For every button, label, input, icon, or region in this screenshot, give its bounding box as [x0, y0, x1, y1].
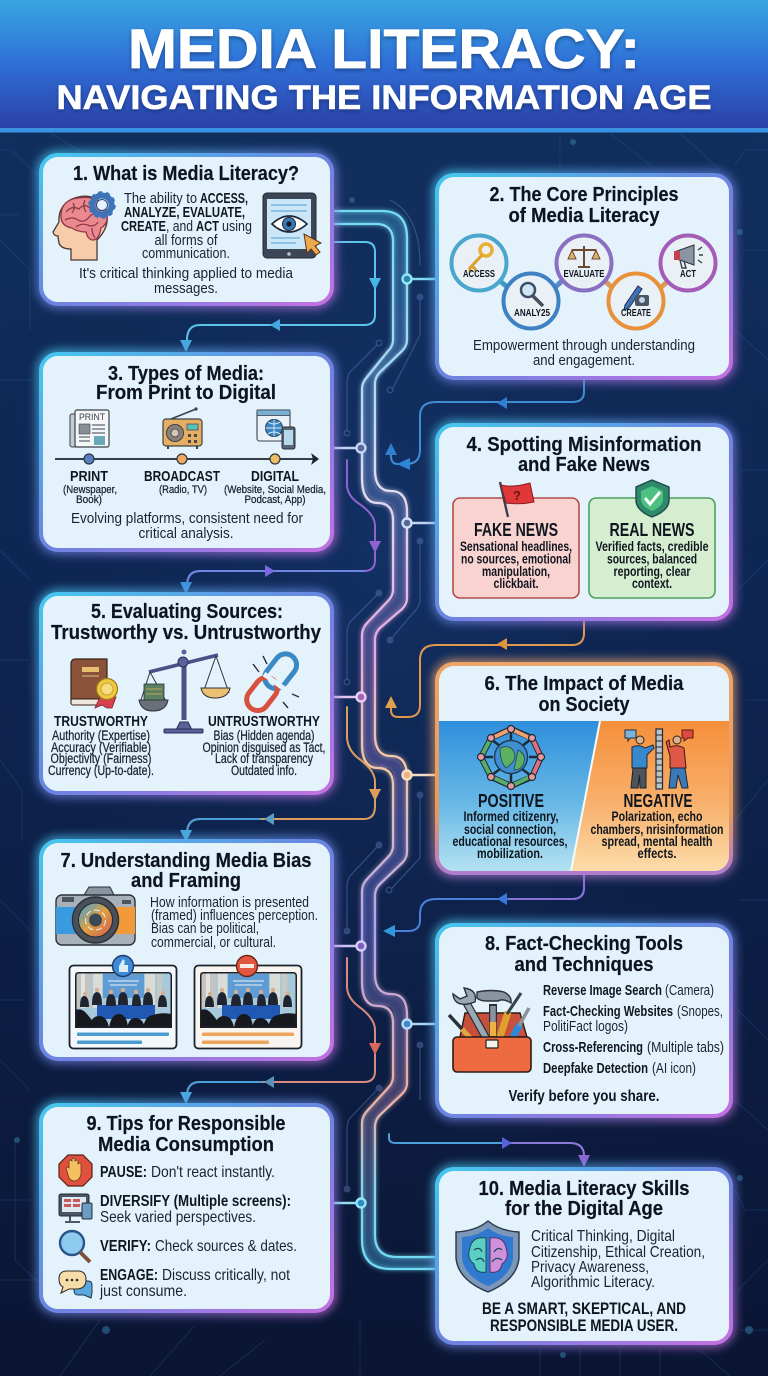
text: framing description: [150, 894, 318, 951]
tip: verify: VERIFY:: [100, 1238, 151, 1255]
labels: media types: (Newspaper,: [63, 484, 117, 496]
heading: for the Digital Age: [505, 1198, 663, 1220]
column: positive: educational resources,: [452, 834, 568, 849]
list: fact-checking methods: PolitiFact logos): [543, 1018, 628, 1035]
text: skills list: [531, 1228, 705, 1291]
column: negative: effects.: [638, 846, 676, 861]
tip: diversify: [59, 1193, 291, 1226]
title: MEDIA LITERACY:: [128, 19, 640, 82]
card: real news: sources, balanced: [607, 552, 697, 566]
column: untrustworthy: Opinion disguised as Tact,: [202, 740, 326, 755]
heading: 6. The Impact of Media: [484, 673, 684, 695]
heading: and Fake News: [518, 454, 650, 476]
timeline chart: [55, 453, 319, 465]
panel: 1 what is media literacy: [41, 155, 332, 304]
tip: pause: Don't react instantly.: [151, 1164, 275, 1181]
column: positive: POSITIVE: [478, 791, 544, 811]
principle: act: ACT: [680, 268, 696, 280]
text: definition: ACCESS,: [200, 190, 248, 207]
arrow: panel 3 to panel 5: [180, 460, 381, 594]
column: positive: Informed citizenry,: [464, 809, 558, 824]
principle: evaluate: [556, 236, 612, 290]
principle: act: [660, 236, 716, 290]
panel: 10 digital age skills: [437, 1169, 731, 1343]
card: real news: [589, 480, 715, 598]
tip: diversify: Seek varied perspectives.: [100, 1209, 256, 1226]
heading: 10. Media Literacy Skills: [478, 1178, 690, 1200]
labels: media types: (Website, Social Media,: [224, 484, 326, 496]
heading: [485, 933, 683, 976]
column: trustworthy: [48, 713, 154, 778]
principle: analyze: [504, 274, 558, 328]
heading: of Media Literacy: [508, 205, 660, 227]
heading: 4. Spotting Misinformation: [466, 434, 702, 456]
column: untrustworthy: [202, 713, 326, 778]
list: fact-checking methods: Reverse Image Search: [543, 982, 662, 999]
heading: Media Consumption: [98, 1134, 274, 1156]
text: definition: all forms of: [154, 232, 218, 249]
panel: 5 evaluating sources: [41, 594, 332, 793]
heading: [51, 601, 322, 644]
heading: Trustworthy vs. Untrustworthy: [51, 622, 322, 644]
column: trustworthy: Currency (Up-to-date).: [48, 763, 154, 778]
labels: media types: BROADCAST: [144, 468, 220, 485]
text: definition: , and: [166, 218, 193, 235]
text: definition: messages.: [154, 280, 218, 297]
text: definition: communication.: [142, 245, 230, 262]
tip: verify: Check sources & dates.: [155, 1238, 297, 1255]
faint traces: [344, 200, 423, 1192]
principle: access: [452, 236, 506, 290]
text: definition: using: [222, 218, 252, 235]
icon: green shield: [636, 480, 669, 517]
labels: media types: PRINT: [70, 468, 108, 485]
arrow: panel 1 to panel 3: [180, 242, 381, 352]
heading: [96, 363, 276, 404]
text: definition: ANALYZE, EVALUATE,: [124, 204, 245, 221]
card: real news: Verified facts, credible: [596, 539, 709, 554]
heading: From Print to Digital: [96, 382, 276, 404]
labels: media types: [63, 468, 326, 506]
panel: 6 impact of media: [437, 664, 731, 873]
principle: access: ACCESS: [463, 268, 495, 280]
panel: 2 core principles: [437, 175, 731, 378]
heading: [60, 850, 312, 892]
column: trustworthy: Objectivity (Fairness): [50, 751, 152, 766]
heading: and Framing: [131, 870, 241, 892]
title: NAVIGATING THE INFORMATION AGE: [56, 79, 712, 117]
text: types summary: critical analysis.: [138, 525, 234, 542]
column: negative: NEGATIVE: [624, 791, 692, 811]
panel: 8 fact-checking tools: [437, 925, 731, 1116]
tip: engage: ENGAGE:: [100, 1267, 158, 1284]
text: types summary: Evolving platforms, consistent need for: [71, 510, 303, 527]
list: fact-checking methods: Deepfake Detection: [543, 1060, 648, 1077]
column: positive: [452, 791, 568, 861]
text: principle summary: Empowerment through understanding: [473, 337, 695, 354]
labels: media types: Podcast, App): [244, 494, 306, 506]
text: closing call to action: RESPONSIBLE MEDIA USER.: [490, 1316, 678, 1335]
text: definition: ACT: [196, 218, 219, 235]
text: framing description: Bias can be political,: [151, 920, 259, 937]
icon: radio: [163, 407, 202, 449]
column: trustworthy: Authority (Expertise): [52, 728, 150, 743]
arrow: panel 4 to panel 6: [385, 619, 584, 717]
heading: [86, 1113, 286, 1156]
card: real news: reporting, clear: [614, 564, 691, 579]
principle chain links: [500, 281, 668, 291]
labels: media types: Book): [76, 494, 102, 506]
card: fake news: FAKE NEWS: [474, 520, 558, 540]
tip: engage: Discuss critically, not: [162, 1267, 290, 1284]
list: fact-checking methods: (AI icon): [652, 1060, 696, 1077]
labels: media types: (Radio, TV): [159, 484, 207, 496]
text: framing description: (framed) influences perception.: [151, 907, 318, 924]
text: principle summary: and engagement.: [533, 352, 635, 369]
icon: browser and phone: [257, 410, 295, 449]
panel: 7 media bias and framing: [41, 841, 332, 1059]
tip: verify: [60, 1231, 297, 1262]
column: trustworthy: Accuracy (Verifiable): [51, 740, 151, 755]
heading: 7. Understanding Media Bias: [60, 850, 312, 872]
arrow: panel 6 to panel 8: [383, 875, 584, 937]
arrow: panel 2 to panel 4: [385, 379, 584, 470]
labels: media types: DIGITAL: [251, 468, 299, 485]
column: untrustworthy: Bias (Hidden agenda): [214, 728, 314, 743]
tip: diversify: DIVERSIFY (Multiple screens):: [100, 1193, 291, 1210]
text: verify callout: Verify before you share.: [508, 1088, 660, 1105]
icon: broken chain: [242, 649, 301, 715]
heading: 5. Evaluating Sources:: [91, 601, 283, 623]
principle: analyze: ANALY25: [514, 307, 550, 319]
text: types summary: [71, 510, 303, 542]
list: fact-checking methods: (Snopes,: [677, 1003, 723, 1020]
column: negative: spread, mental health: [602, 834, 712, 849]
text: closing call to action: BE A SMART, SKEPTICAL, AND: [482, 1299, 686, 1318]
icon: newspaper: PRINT: [79, 412, 105, 423]
icon: shield with brain: [456, 1221, 519, 1292]
card: real news: context.: [632, 576, 672, 591]
panel: 4 spotting misinformation: [437, 425, 731, 619]
heading: 8. Fact-Checking Tools: [485, 933, 683, 955]
title: [56, 17, 712, 119]
column: untrustworthy: UNTRUSTWORTHY: [208, 713, 320, 730]
heading: [490, 184, 678, 227]
heading: [478, 1178, 690, 1220]
text: definition: CREATE: [121, 218, 166, 235]
icon: newspaper: [70, 410, 109, 447]
icon: camera: [56, 887, 135, 945]
text: definition: It's critical thinking applied to media: [79, 265, 294, 282]
card: real news: REAL NEWS: [610, 520, 694, 540]
arrow: panel 8 to panel 10: [389, 1134, 590, 1167]
icon: balance scale: [139, 650, 230, 733]
tip: engage: just consume.: [99, 1283, 187, 1300]
arrow: panel 5 to panel 7: [180, 707, 381, 842]
column: untrustworthy: Lack of transparency: [215, 751, 313, 766]
text: framing description: commercial, or cultural.: [151, 934, 276, 951]
card: fake news: no sources, emotional: [461, 552, 571, 566]
tip: engage: [59, 1267, 290, 1300]
heading: [466, 434, 702, 476]
column: trustworthy: TRUSTWORTHY: [54, 713, 148, 730]
column: negative: Polarization, echo: [612, 809, 702, 824]
text: definition: [79, 190, 294, 297]
heading: [484, 673, 684, 716]
card: negative framing photo: [194, 956, 302, 1048]
heading: and Techniques: [514, 954, 654, 976]
icon: polarized people: [625, 729, 693, 789]
negative half background: [571, 721, 729, 871]
heading: 2. The Core Principles: [490, 184, 678, 206]
icon: tablet with eye: [263, 193, 321, 258]
text: definition: The ability to: [124, 190, 197, 207]
text: framing description: How information is presented: [150, 894, 309, 911]
positive half background: [439, 721, 600, 871]
icon: toolbox: [449, 988, 531, 1072]
title: NAVIGATING THE INFORMATION AGE: [56, 81, 712, 119]
list: fact-checking methods: Cross-Referencing: [543, 1039, 643, 1056]
column: positive: social connection,: [464, 822, 556, 837]
column: positive: mobilization.: [477, 846, 543, 861]
panel: 9 responsible consumption: [41, 1105, 332, 1311]
icon: red flag: ?: [513, 488, 521, 503]
text: skills list: Privacy Awareness,: [531, 1259, 649, 1276]
connector bus: main circuit trunk: [333, 211, 437, 1269]
connector nodes linking panels to the trunk: [333, 274, 437, 1208]
heading: on Society: [538, 694, 630, 716]
card: fake news: Sensational headlines,: [460, 539, 572, 554]
heading: 1. What is Media Literacy?: [73, 163, 299, 185]
principle: create: CREATE: [621, 307, 651, 319]
text: skills list: Critical Thinking, Digital: [531, 1228, 675, 1245]
card: positive framing photo: [70, 956, 176, 1048]
column: untrustworthy: Outdated info.: [231, 763, 297, 778]
tip: pause: PAUSE:: [100, 1164, 147, 1181]
heading: 9. Tips for Responsible: [86, 1113, 286, 1135]
icon: book with ribbon: [71, 659, 118, 708]
text: skills list: Algorithmic Literacy.: [531, 1274, 655, 1291]
text: principle summary: [473, 337, 695, 369]
tip: pause: [59, 1155, 275, 1186]
list: fact-checking methods: (Multiple tabs): [647, 1039, 724, 1056]
card: fake news: [453, 482, 579, 598]
panel: 3 types of media: [41, 354, 332, 550]
text: skills list: Citizenship, Ethical Creation,: [531, 1244, 705, 1261]
arrow: panel 7 to panel 9: [180, 958, 381, 1104]
icon: globe with connected people: [478, 726, 544, 790]
principle: evaluate: EVALUATE: [564, 268, 604, 280]
column: negative: [590, 791, 724, 861]
header banner: [0, 0, 768, 132]
list: fact-checking methods: [543, 982, 724, 1077]
text: closing call to action: [482, 1299, 686, 1335]
card: fake news: clickbait.: [494, 576, 538, 591]
list: fact-checking methods: Fact-Checking Websites: [543, 1003, 673, 1020]
column: negative: chambers, nrisinformation: [590, 822, 724, 837]
principle: create: [608, 274, 664, 328]
list: fact-checking methods: (Camera): [665, 982, 714, 999]
icon: head with brain and gear: [53, 193, 114, 260]
title: MEDIA LITERACY:: [128, 17, 640, 80]
card: fake news: manipulation,: [482, 564, 550, 579]
heading: 3. Types of Media:: [108, 363, 264, 385]
